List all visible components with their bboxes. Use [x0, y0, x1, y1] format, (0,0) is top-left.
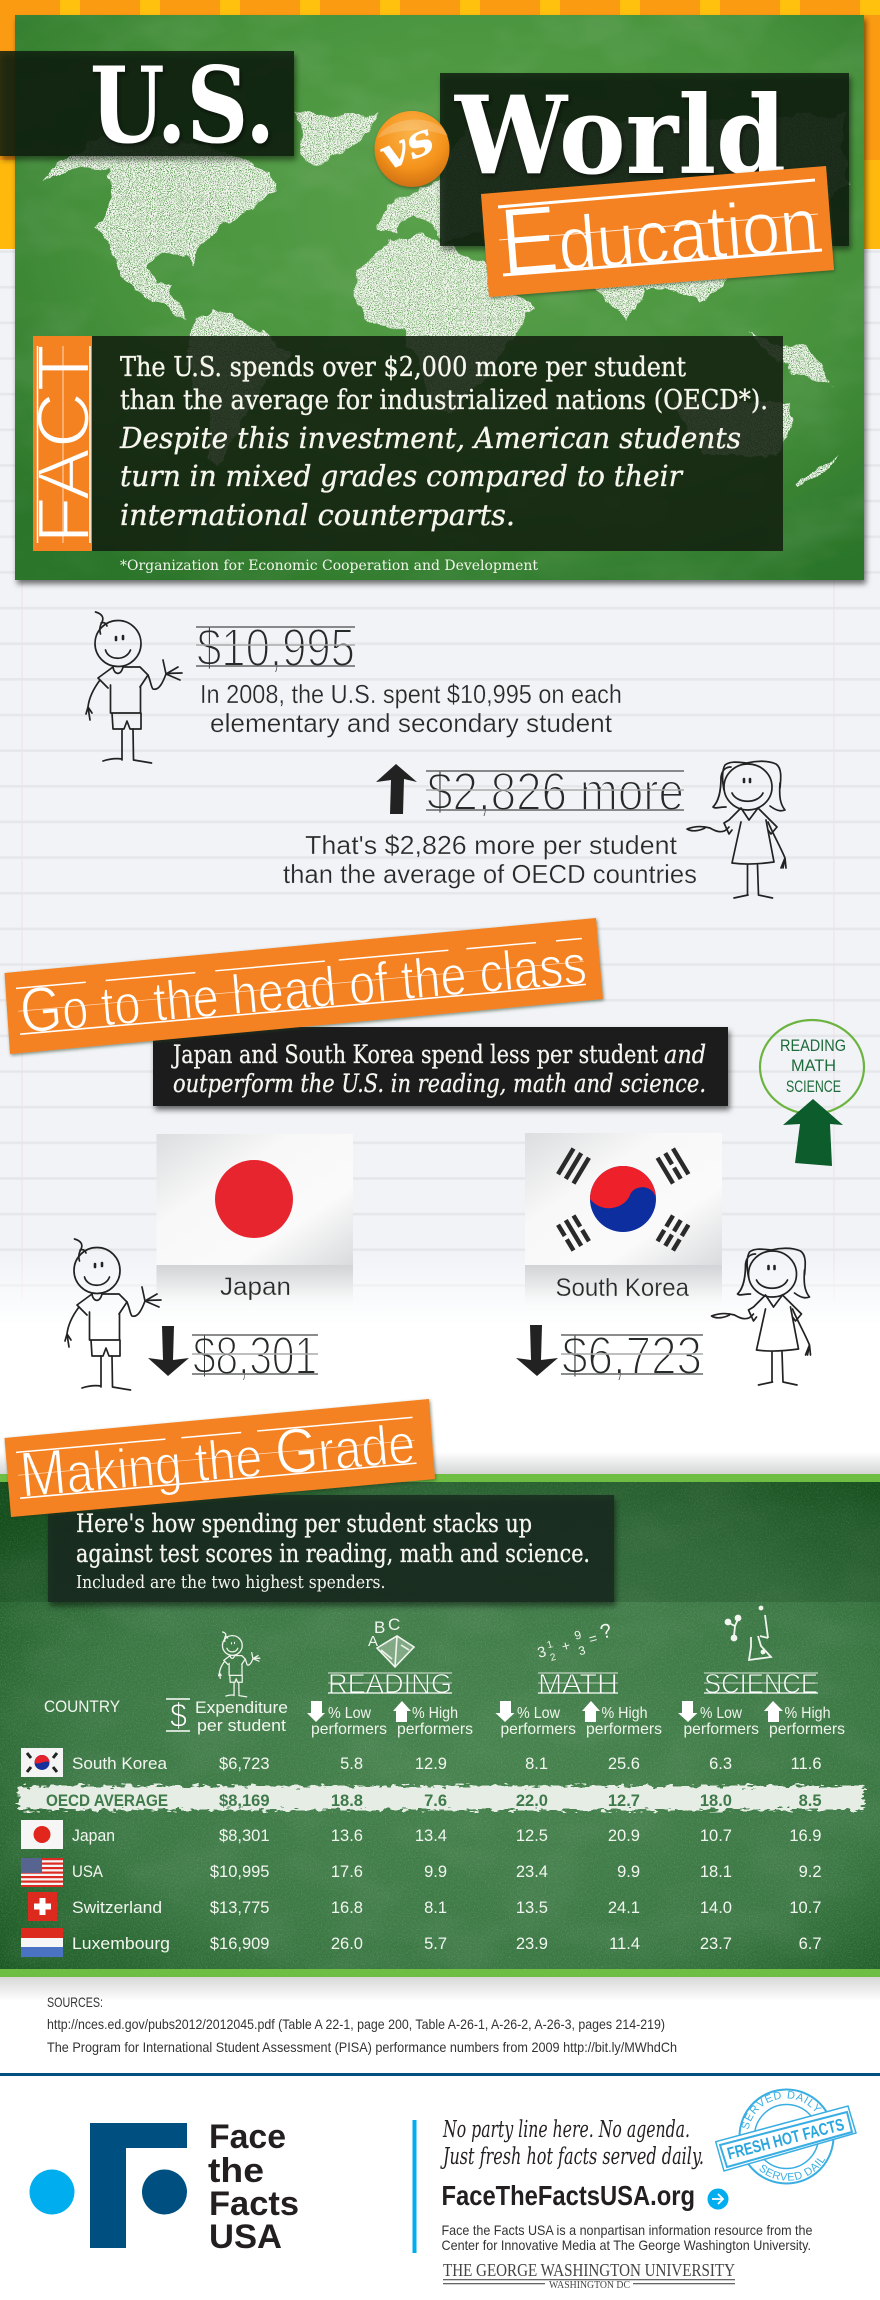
text: 2008 spending — [200, 679, 622, 738]
row: OECD average: 22.0 — [516, 1792, 548, 1810]
row: Japan: 12.5 — [516, 1827, 548, 1845]
row: USA: 18.1 — [700, 1863, 732, 1881]
logo wordmark: the — [208, 2152, 264, 2190]
row: South Korea: 11.6 — [791, 1755, 822, 1773]
text: 2008 spending: In 2008, the U.S. spent $10,995 on each — [200, 679, 622, 709]
sources — [47, 1994, 677, 2055]
flag emblem — [558, 1149, 688, 1250]
divider rule — [0, 2073, 880, 2076]
tagline: No party line here. No agenda. — [442, 2117, 690, 2143]
row: South Korea: South Korea — [72, 1754, 168, 1773]
icon: math formula: 1 — [546, 1639, 554, 1651]
column headers: reading — [307, 1701, 473, 1738]
panel: Japan flag card: Japan — [220, 1273, 291, 1301]
row: Luxembourg: 11.4 — [609, 1935, 640, 1953]
flag: USA — [21, 1858, 63, 1887]
figure: boy by Japan — [65, 1239, 161, 1390]
row: USA: 9.9 — [617, 1863, 640, 1881]
logo wordmark: Facts — [209, 2185, 299, 2223]
flag: Japan — [21, 1820, 63, 1849]
row: OECD average — [18, 1786, 864, 1810]
row: USA: USA — [72, 1862, 104, 1881]
column headers: math: % Low — [517, 1705, 560, 1722]
page background: ruled paper — [0, 249, 880, 1345]
description — [442, 2222, 813, 2253]
icon: dollar sign: $ — [170, 1697, 187, 1735]
chalk world map — [43, 113, 847, 486]
column headers: math: % High — [602, 1705, 648, 1722]
sources: The Program for International Student Assessment (PISA) performance numbers from 2009 http://bit.ly/MWhdCh — [47, 2039, 677, 2055]
intro text box: against test scores in reading, math and science. — [76, 1539, 590, 1568]
row: OECD average: 18.0 — [700, 1792, 732, 1810]
row: Japan: Japan — [72, 1826, 115, 1845]
callout: Japan and South Korea: and — [664, 1040, 706, 1069]
panel: header chalkboard — [0, 15, 864, 580]
row: Switzerland: 10.7 — [789, 1899, 822, 1917]
World title block: World — [454, 73, 786, 199]
row: Japan: 10.7 — [700, 1827, 732, 1845]
row: OECD average: $8,169 — [219, 1792, 270, 1810]
row: OECD average: 8.5 — [799, 1792, 822, 1810]
row: Luxembourg — [21, 1928, 822, 1957]
subject heading: science: SCIENCE — [704, 1668, 818, 1699]
board background — [15, 15, 864, 580]
callout: Japan and South Korea: Japan and South Korea spend less per student — [171, 1040, 658, 1069]
row: OECD average: OECD AVERAGE — [46, 1792, 168, 1810]
icon: math formula — [534, 1620, 616, 1669]
logo wordmark — [208, 2118, 299, 2256]
row: OECD average: 18.8 — [331, 1792, 363, 1810]
header: expenditure: per student — [197, 1716, 286, 1735]
icon: up arrow — [376, 764, 417, 814]
fact statement: Despite this investment, American students — [119, 421, 741, 455]
row: South Korea: 25.6 — [608, 1755, 640, 1773]
table header: country: COUNTRY — [44, 1697, 120, 1716]
badge: reading math science: SCIENCE — [786, 1077, 841, 1096]
column headers: science — [678, 1701, 845, 1738]
icon: math formula: = — [587, 1630, 599, 1647]
row: South Korea: $6,723 — [219, 1755, 270, 1773]
description: Center for Innovative Media at The George Washington University. — [442, 2237, 811, 2253]
icon: down arrow Japan — [148, 1326, 189, 1376]
row: Japan: 16.9 — [789, 1827, 822, 1845]
stat: $2,826 more: $2,826 more — [427, 762, 684, 822]
subject heading: reading: READING — [328, 1668, 452, 1699]
flag: South Korea — [21, 1748, 63, 1777]
callout: Japan and South Korea — [153, 1027, 728, 1106]
row: USA: $10,995 — [210, 1863, 270, 1881]
panel: South Korea flag card: South Korea — [556, 1274, 689, 1302]
fact statement: The U.S. spends over $2,000 more per student — [120, 352, 686, 383]
fact statement: turn in mixed grades compared to their — [120, 459, 684, 493]
row: USA: 17.6 — [331, 1863, 363, 1881]
FACT tab: FACT — [22, 344, 105, 544]
logo mark — [30, 2123, 187, 2248]
panel: Making the Grade table board — [0, 1452, 880, 2001]
subject heading: math: MATH — [538, 1668, 618, 1699]
column headers: math — [496, 1701, 662, 1738]
badge: reading math science — [760, 1020, 864, 1166]
description: Face the Facts USA is a nonpartisan information resource from the — [442, 2222, 813, 2238]
figure: girl by South Korea — [712, 1248, 810, 1385]
row: Switzerland: 8.1 — [424, 1899, 447, 1917]
row: Luxembourg: 23.7 — [700, 1935, 732, 1953]
row: Switzerland: $13,775 — [210, 1899, 270, 1917]
icon: math formula: 2 — [549, 1652, 558, 1664]
logo wordmark: USA — [209, 2218, 282, 2256]
intro text box — [48, 1495, 614, 1602]
sources: SOURCES: — [47, 1994, 103, 2010]
row: South Korea: 8.1 — [525, 1755, 548, 1773]
sources: http://nces.ed.gov/pubs2012/2012045.pdf (Table A 22-1, page 200, Table A-26-1, A-26-2, A-26-3, pages 214-219) — [47, 2016, 665, 2032]
column headers: reading: performers — [311, 1721, 387, 1738]
fact statement: international counterparts. — [120, 498, 515, 532]
row: USA: 23.4 — [516, 1863, 548, 1881]
row: Japan: $8,301 — [219, 1827, 270, 1845]
fact panel — [22, 336, 783, 551]
row: Switzerland: 14.0 — [700, 1899, 732, 1917]
vs badge: vs — [372, 112, 442, 181]
stripe band behind header — [0, 0, 880, 249]
column headers: reading: % Low — [328, 1705, 371, 1722]
column headers: science: performers — [769, 1721, 845, 1738]
header: expenditure: Expenditure — [195, 1698, 288, 1717]
row: Luxembourg: 26.0 — [331, 1935, 363, 1953]
figure: girl — [687, 761, 786, 898]
text: OECD difference — [283, 830, 697, 889]
fact statement — [119, 352, 768, 532]
footnote: *Organization for Economic Cooperation and Development — [120, 558, 538, 574]
GWU wordmark: WASHINGTON DC — [549, 2280, 630, 2291]
figure: boy waving — [86, 612, 182, 763]
GWU wordmark: THE GEORGE WASHINGTON UNIVERSITY — [443, 2260, 735, 2280]
row: Japan: 13.6 — [331, 1827, 363, 1845]
icon: math formula: 3 — [536, 1643, 548, 1662]
text: OECD difference: That's $2,826 more per student — [305, 830, 678, 860]
column headers: math: performers — [500, 1721, 576, 1738]
stamp: fresh hot facts: FRESH HOT FACTS — [725, 2115, 846, 2163]
fact statement: than the average for industrialized nations (OECD*). — [120, 385, 768, 416]
logo: Face the Facts USA — [30, 2118, 299, 2256]
intro text box: Here's how spending per student stacks up — [76, 1509, 532, 1538]
icon: math formula: ? — [598, 1620, 614, 1644]
row: Japan: 20.9 — [608, 1827, 640, 1845]
row: OECD average: 7.6 — [424, 1792, 447, 1810]
column headers: science: performers — [684, 1721, 759, 1738]
row: South Korea: 5.8 — [340, 1755, 363, 1773]
badge: reading math science: READING — [780, 1036, 846, 1055]
row: Switzerland: 13.5 — [516, 1899, 548, 1917]
row: Luxembourg: Luxembourg — [72, 1934, 170, 1953]
column headers: science: % High — [784, 1705, 830, 1722]
row: Switzerland: Switzerland — [72, 1898, 162, 1917]
U.S. title block — [0, 43, 294, 167]
column headers: reading: % High — [412, 1705, 458, 1722]
icon: green up arrow — [783, 1099, 843, 1166]
stamp: fresh hot facts: SERVED DAILY — [760, 2158, 826, 2181]
header: expenditure — [195, 1698, 288, 1735]
heading banner: Go to the head of the class: Go to the head of the class — [17, 925, 589, 1047]
panel: South Korea flag card — [525, 1133, 722, 1313]
icon: book and ABC: B — [374, 1618, 385, 1637]
text: 2008 spending: elementary and secondary student — [210, 708, 613, 738]
row: Switzerland: 16.8 — [331, 1899, 363, 1917]
heading banner: Making the Grade: Making the Grade — [17, 1404, 418, 1511]
icon: math formula: + — [560, 1637, 572, 1654]
row: South Korea: 6.3 — [709, 1755, 732, 1773]
row: Switzerland — [28, 1892, 822, 1921]
callout: Japan and South Korea: outperform the U.S. in reading, math and science. — [173, 1069, 706, 1098]
panel: Japan flag card — [156, 1134, 353, 1313]
row: Luxembourg: 5.7 — [424, 1935, 447, 1953]
logo wordmark: Face — [209, 2118, 286, 2156]
stamp: fresh hot facts: SERVED DAILY — [742, 2090, 822, 2129]
row: Luxembourg: 23.9 — [516, 1935, 548, 1953]
badge: reading math science: MATH — [791, 1056, 836, 1075]
vertical divider — [412, 2120, 416, 2253]
column headers: science: % Low — [700, 1705, 742, 1722]
icon: math formula: 9 — [573, 1627, 583, 1643]
U.S. title block: U.S. — [90, 43, 275, 167]
row: South Korea: 12.9 — [415, 1755, 447, 1773]
website link: FaceTheFactsUSA.org — [442, 2180, 695, 2211]
stat: $10,995: $10,995 — [197, 618, 355, 678]
tagline — [440, 2117, 704, 2170]
flag: Luxembourg — [21, 1928, 63, 1957]
row: USA — [21, 1858, 822, 1887]
flag disc — [215, 1160, 293, 1238]
intro text box: Included are the two highest spenders. — [76, 1572, 386, 1593]
icon: arrow circle — [708, 2188, 728, 2210]
column headers: reading: performers — [397, 1721, 473, 1738]
icon: book and ABC: C — [388, 1615, 400, 1634]
stat: $6,723: $6,723 — [562, 1326, 702, 1386]
row: Japan — [21, 1820, 822, 1849]
icon: math formula: 3 — [577, 1643, 587, 1658]
GWU wordmark — [443, 2260, 735, 2291]
icon: chalk boy — [219, 1632, 260, 1697]
row: OECD average: 12.7 — [608, 1792, 640, 1810]
icon: down arrow South Korea — [516, 1325, 558, 1376]
fact text background — [92, 336, 783, 551]
row: USA: 9.2 — [799, 1863, 822, 1881]
board texture — [15, 15, 864, 580]
column headers: math: performers — [586, 1721, 662, 1738]
row: South Korea — [21, 1748, 822, 1777]
tagline: Just fresh hot facts served daily. — [440, 2144, 704, 2170]
stat: $8,301: $8,301 — [193, 1326, 317, 1386]
icon: science flask — [726, 1606, 771, 1660]
World title block — [440, 73, 849, 246]
Education banner: Education — [496, 165, 822, 296]
flag: Switzerland — [28, 1892, 57, 1921]
row: Japan: 13.4 — [415, 1827, 447, 1845]
row: Switzerland: 24.1 — [608, 1899, 640, 1917]
row: Luxembourg: $16,909 — [210, 1935, 270, 1953]
text: OECD difference: than the average of OECD countries — [283, 859, 697, 889]
icon: book and ABC — [368, 1615, 414, 1667]
row: Luxembourg: 6.7 — [799, 1935, 822, 1953]
row: USA: 9.9 — [424, 1863, 447, 1881]
icon: book and ABC: A — [368, 1633, 378, 1650]
